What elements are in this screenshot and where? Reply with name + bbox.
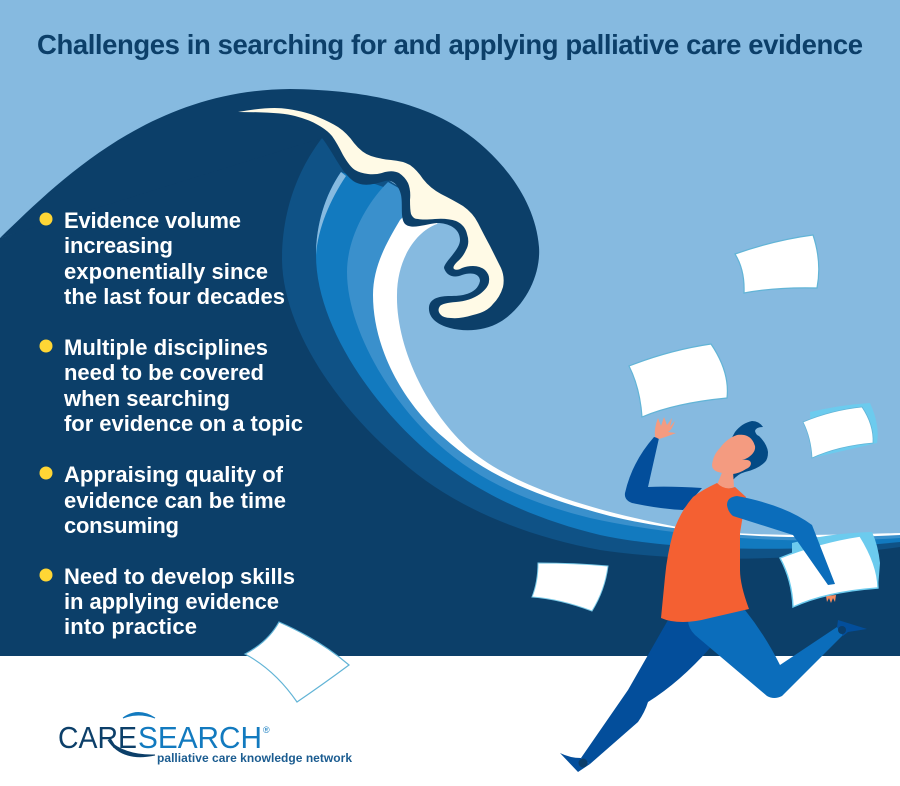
bullet 3: [40, 462, 286, 538]
white ground: [0, 656, 900, 786]
bullet 2: Multiple disciplines: [64, 335, 268, 360]
logo: CareSearch: [58, 712, 352, 765]
bullet 3: evidence can be time: [64, 488, 286, 513]
raised hand: [655, 417, 676, 439]
bullet 3: consuming: [64, 513, 179, 538]
paper: lower centre: [532, 563, 608, 611]
logo: CareSearch: CARE: [58, 720, 137, 755]
bullet 4: into practice: [64, 614, 197, 639]
front arm: [727, 496, 835, 585]
bullet 1: exponentially since: [64, 259, 268, 284]
bullet 4: Need to develop skills: [64, 564, 295, 589]
front leg: [688, 610, 843, 698]
bullet 1: [40, 208, 285, 309]
bullet 2: need to be covered: [64, 360, 264, 385]
paper: top right: [735, 235, 819, 293]
back leg: [581, 610, 710, 764]
logo: CareSearch: palliative care knowledge network: [157, 751, 352, 765]
face: [712, 435, 755, 474]
bullet 1: the last four decades: [64, 284, 285, 309]
front shoe: [837, 620, 867, 636]
paper: falling at ground line: [245, 622, 349, 702]
bullet 1: Evidence volume: [64, 208, 241, 233]
bullet 4: [40, 564, 295, 639]
bullet 2: [40, 335, 303, 436]
paper held under arm: [780, 532, 880, 607]
hair: [725, 421, 768, 480]
bullet 2: for evidence on a topic: [64, 411, 303, 436]
back shoe: [560, 753, 590, 772]
person running: [560, 417, 880, 772]
title: Challenges in searching for and applying palliative care evidence: [37, 29, 863, 60]
orange shirt: [661, 483, 749, 622]
bullet 2: when searching: [63, 386, 230, 411]
neck: [717, 470, 734, 489]
logo: CareSearch: SEARCH: [138, 720, 262, 755]
bullet 3: Appraising quality of: [64, 462, 284, 487]
wave foam ribbon: [238, 108, 504, 318]
bullet list: [40, 208, 303, 639]
wave illustration: [0, 89, 900, 656]
logo: CareSearch: ®: [263, 725, 270, 735]
bullet 1: increasing: [64, 233, 173, 258]
paper: right with blue backing: [803, 403, 878, 458]
back arm: [625, 437, 702, 510]
bullet 4: in applying evidence: [64, 589, 279, 614]
paper: middle: [629, 344, 727, 417]
wave crest: [0, 89, 539, 330]
